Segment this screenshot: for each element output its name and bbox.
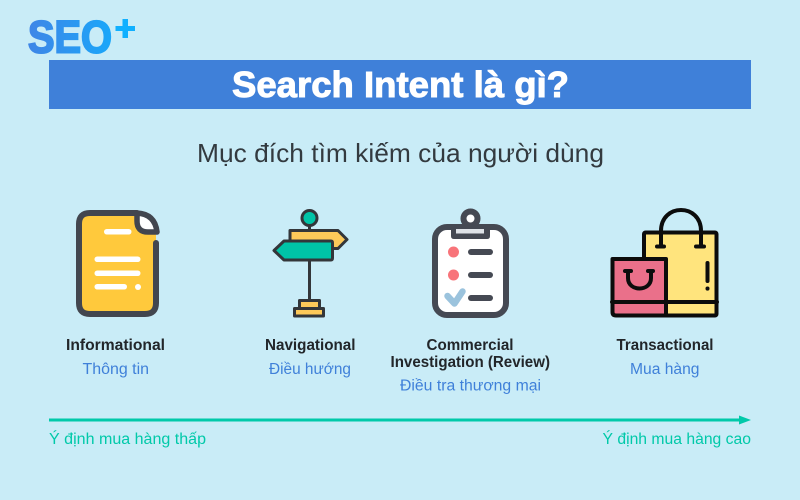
label: Transactional: Mua hàng xyxy=(630,361,700,378)
icon: document xyxy=(79,213,157,314)
title banner: Search Intent là gì? xyxy=(232,64,569,105)
label: Navigational: Điều hướng xyxy=(269,361,351,378)
label: Commercial Investigation: Investigation (Review) xyxy=(390,354,550,371)
label: Commercial Investigation: Commercial xyxy=(426,337,514,354)
label: Transactional xyxy=(616,337,714,378)
label: Informational: Informational xyxy=(66,337,165,354)
label: Transactional: Transactional xyxy=(616,337,714,354)
icon: clipboard checklist xyxy=(435,212,506,315)
logo: SEO+: SEO xyxy=(28,12,112,62)
label: Informational xyxy=(66,337,165,378)
icon: signpost xyxy=(274,210,347,316)
subtitle: Mục đích tìm kiếm của người dùng xyxy=(197,138,604,168)
label: high purchase intent: Ý định mua hàng cao xyxy=(602,431,751,448)
label: low purchase intent: Ý định mua hàng thấp xyxy=(49,431,206,448)
label: Commercial Investigation: Điều tra thương mại xyxy=(400,378,541,394)
title banner xyxy=(49,60,751,109)
label: Navigational: Navigational xyxy=(265,337,356,354)
label: Navigational xyxy=(265,337,356,378)
label: Informational: Thông tin xyxy=(82,361,149,378)
arrow: purchase intent scale xyxy=(49,416,751,424)
icon: shopping bags xyxy=(612,210,717,316)
label: Commercial Investigation xyxy=(390,337,550,394)
